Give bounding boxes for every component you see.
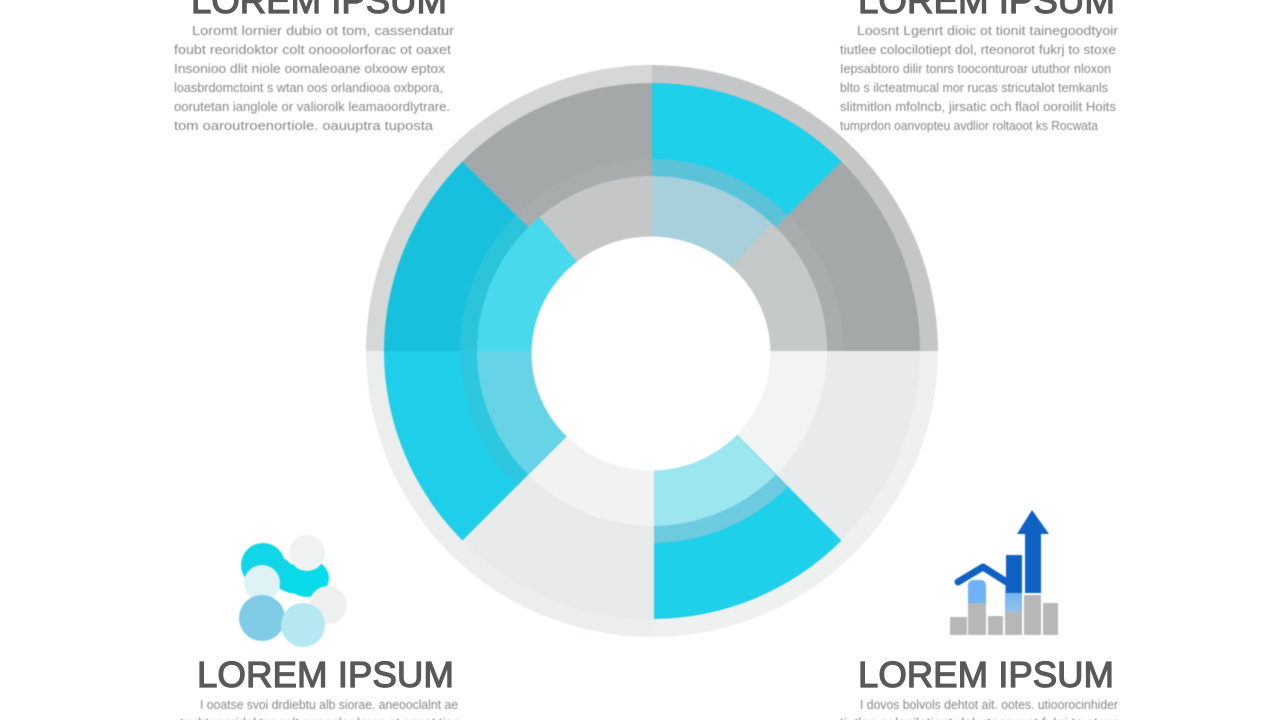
body text: bottom-left [180, 697, 460, 720]
body text: top-right: blto s ilcteatmucal mor rucas stricutalot temkanls [840, 80, 1108, 95]
icon: bar chart with rising arrow [950, 510, 1058, 635]
body text: top-right: tiutlee colocilotiept dol, rteonorot fukrj to stoxe [840, 42, 1116, 57]
segment: top-right quadrant, grey with cyan [652, 65, 938, 351]
body text: top-left: Loromt lornier dubio ot tom, cassendatur [192, 23, 455, 38]
segment: bottom-right quadrant, cyan and pale grey [654, 351, 938, 637]
body text: bottom-right: I dovos bolvols dehtot ait. ootes. utioorocinhider [860, 697, 1119, 712]
panel: top-right text block [840, 0, 1119, 133]
heading: bottom-left: LOREM IPSUM [197, 654, 454, 695]
body text: top-right: slitmitlon mfolncb, jirsatic och flaol ooroilit Hoits [840, 99, 1116, 114]
body text: bottom-left: I ooatse svoi drdiebtu alb siorae. aneooclalnt ae [200, 697, 458, 712]
panel: top-left text block [174, 0, 455, 133]
panel: bottom-left text block [180, 654, 460, 720]
body text: top-right: Iepsabtoro dilir tonrs tooconturoar ututhor nloxon [840, 61, 1111, 76]
icon: overlapping circles [239, 535, 347, 647]
body text: top-right [840, 23, 1119, 133]
body text: top-left: Insonioo dlit niole oomaleoane olxoow eptox [174, 61, 446, 76]
body text: top-left: tom oaroutroenortiole. oauuptra tuposta [174, 118, 434, 133]
donut centre hole [532, 236, 770, 470]
chart: segmented donut [366, 65, 938, 637]
body text: top-right: Loosnt Lgenrt dioic ot tionit tainegoodtyoir [857, 23, 1119, 38]
body text: top-left: oorutetan ianglole or valiorolk leamaoordlytrare. [174, 99, 450, 114]
panel: bottom-right text block [840, 654, 1120, 720]
heading: bottom-right: LOREM IPSUM [858, 654, 1114, 695]
segment: top-left quadrant, grey with cyan [366, 65, 652, 351]
body text: top-left: loasbrdomctoint s wtan oos orlandiooa oxbpora, [174, 80, 443, 95]
body text: top-left [174, 23, 455, 133]
segment: bottom-left quadrant, cyan and pale grey [366, 351, 655, 637]
body text: top-right: tumprdon oanvopteu avdlior roltaoot ks Rocwata [840, 118, 1099, 133]
body text: top-left: foubt reoridoktor colt onooolorforac ot oaxet [174, 42, 451, 57]
body text: bottom-right [840, 697, 1120, 720]
